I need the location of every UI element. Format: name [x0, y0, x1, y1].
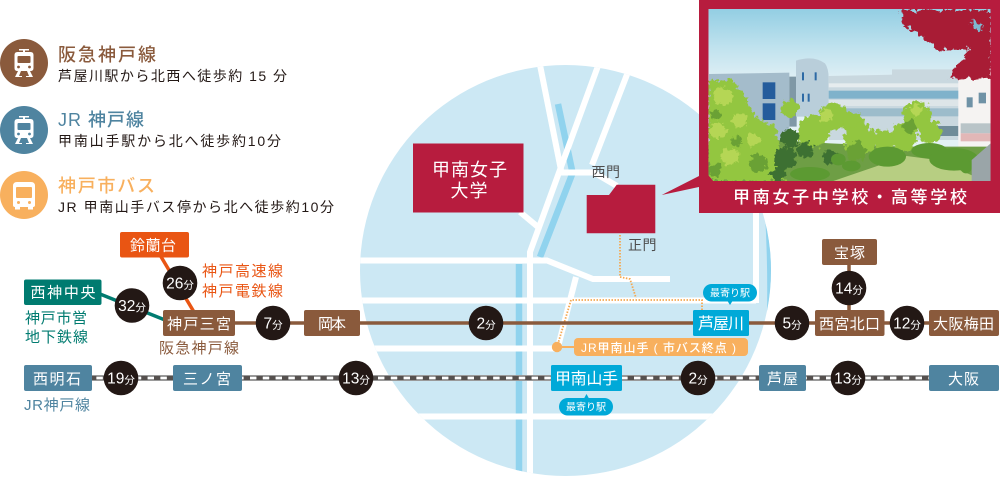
label: Kobe Kosoku and Dentetsu lines: 神戸電鉄線 [202, 283, 283, 300]
time badge: 13 minutes: 13分 [342, 370, 370, 388]
hedges [790, 143, 979, 181]
station: Ashiyagawa [693, 310, 749, 336]
map label: Konan Women's University: 大学 [450, 181, 488, 201]
station: Nishi-Akashi [24, 365, 92, 391]
bus stop label: JR甲南山手 ( 市バス終点 ) [581, 340, 736, 355]
station: Seishin-chuo: 西神中央 [30, 284, 96, 302]
line: Hankyu Kobe main [163, 240, 999, 323]
label: Hankyu Kobe line: 阪急神戸線 [159, 340, 239, 357]
time badge: 7 minutes [256, 306, 290, 340]
legend: Kobe city bus: JR 甲南山手バス停から北へ徒歩約10分 [58, 199, 334, 215]
callout pointer [662, 176, 700, 195]
callout: nearest station Konan-Yamate [559, 394, 613, 416]
time badge: 14 minutes [832, 271, 866, 305]
line: JR Kobe [90, 375, 930, 381]
map: area circle [360, 65, 776, 477]
school building marker [587, 185, 655, 233]
icon: bus [13, 182, 35, 210]
callout: nearest station Ashiyagawa: 最寄り駅 [710, 288, 750, 300]
time badge: 13 minutes [831, 361, 865, 395]
station: Konan-Yamate [551, 365, 622, 391]
station: Osaka-Umeda [929, 310, 999, 336]
time badge: 19 minutes: 19分 [107, 370, 135, 388]
station: Osaka: 大阪 [948, 371, 979, 388]
photo of school [708, 9, 991, 182]
station: Kobe-Sannomiya [163, 310, 235, 336]
label: main gate: 正門 [628, 237, 656, 253]
legend: JR Kobe line: 甲南山手駅から北へ徒歩約10分 [58, 133, 281, 149]
roads [360, 65, 772, 477]
station: Konan-Yamate: 甲南山手 [555, 370, 618, 388]
station: Ashiya [759, 365, 806, 391]
legend: JR Kobe line: JR 神戸線 [58, 110, 144, 130]
time badge: 12 minutes: 12分 [893, 316, 921, 332]
time badge: 2 minutes: 2分 [476, 316, 496, 332]
legend: Kobe city bus [0, 171, 334, 219]
time badge: 5 minutes: 5分 [782, 316, 802, 332]
time badge: 14 minutes: 14分 [835, 280, 863, 298]
icon: train [14, 116, 34, 144]
station: Takarazuka [822, 239, 877, 265]
line: Kobe Kosoku branch [160, 255, 194, 312]
station: Nishinomiya-kitaguchi: 西宮北口 [819, 316, 880, 333]
station: Suzurandai: 鈴蘭台 [130, 238, 176, 254]
station: Okamoto [304, 310, 360, 336]
bus stop label [552, 338, 748, 356]
time badge: 5 minutes [775, 306, 809, 340]
time badge: 19 minutes [104, 361, 138, 395]
time badge: 2 minutes [469, 306, 503, 340]
map label: Konan Women's University: 甲南女子 [432, 160, 507, 180]
station: Ashiyagawa: 芦屋川 [698, 315, 744, 333]
label: Kobe municipal subway: 地下鉄線 [25, 329, 88, 346]
rivers [519, 104, 776, 476]
time badge: 26 minutes [163, 266, 197, 300]
time badge: 12 minutes [890, 306, 924, 340]
time badge: 32 minutes: 32分 [118, 298, 146, 315]
station: Sannomiya [173, 365, 242, 391]
station: Osaka-Umeda: 大阪梅田 [933, 316, 994, 333]
label: Kobe municipal subway [25, 310, 88, 346]
time badge: 13 minutes: 13分 [834, 370, 862, 388]
panel: school photo [699, 0, 1000, 213]
label: Kobe Kosoku and Dentetsu lines: 神戸高速線 [202, 263, 283, 280]
time badge: 2 minutes: 2分 [688, 370, 708, 388]
station: Seishin-chuo [24, 280, 102, 305]
line: Kobe subway branch [100, 294, 165, 320]
label: Kobe municipal subway: 神戸市営 [25, 310, 87, 327]
station: Osaka [929, 365, 999, 391]
time badge: 26 minutes: 26分 [166, 276, 194, 292]
label: JR Kobe line: JR神戸線 [24, 397, 90, 414]
icon: train [14, 49, 34, 77]
station: Nishi-Akashi: 西明石 [33, 371, 81, 388]
station: Okamoto: 岡本 [318, 316, 346, 333]
walking route: main gate dotted path [557, 235, 702, 347]
callout: nearest station Ashiyagawa [703, 284, 757, 305]
station: Suzurandai [120, 232, 189, 258]
callout: nearest station Konan-Yamate: 最寄り駅 [566, 402, 606, 414]
legend: Hankyu Kobe line [0, 39, 287, 87]
label: west gate: 西門 [592, 164, 620, 180]
time badge: 7 minutes: 7分 [263, 316, 283, 332]
legend: Hankyu Kobe line: 阪急神戸線 [58, 45, 156, 65]
foreground base [708, 140, 990, 181]
station: Nishinomiya-kitaguchi [815, 310, 884, 336]
foliage [708, 80, 941, 182]
maple leaves [900, 10, 991, 78]
panel: school photo: 甲南女子中学校・高等学校 [733, 188, 967, 207]
time badge: 13 minutes [339, 361, 373, 395]
time badge: 32 minutes [115, 288, 149, 323]
label: Kobe Kosoku and Dentetsu lines [202, 263, 283, 300]
map label: Konan Women's University [413, 144, 524, 212]
legend: Hankyu Kobe line: 芦屋川駅から北西へ徒歩約 15 分 [58, 68, 287, 84]
legend: JR Kobe line [0, 106, 281, 154]
time badge: 2 minutes [681, 361, 715, 395]
station: Takarazuka: 宝塚 [834, 245, 865, 262]
station: Kobe-Sannomiya: 神戸三宮 [167, 316, 231, 333]
legend: Kobe city bus: 神戸市バス [58, 176, 155, 196]
station: Ashiya: 芦屋 [767, 371, 798, 388]
station: Sannomiya: 三ノ宮 [183, 371, 231, 388]
